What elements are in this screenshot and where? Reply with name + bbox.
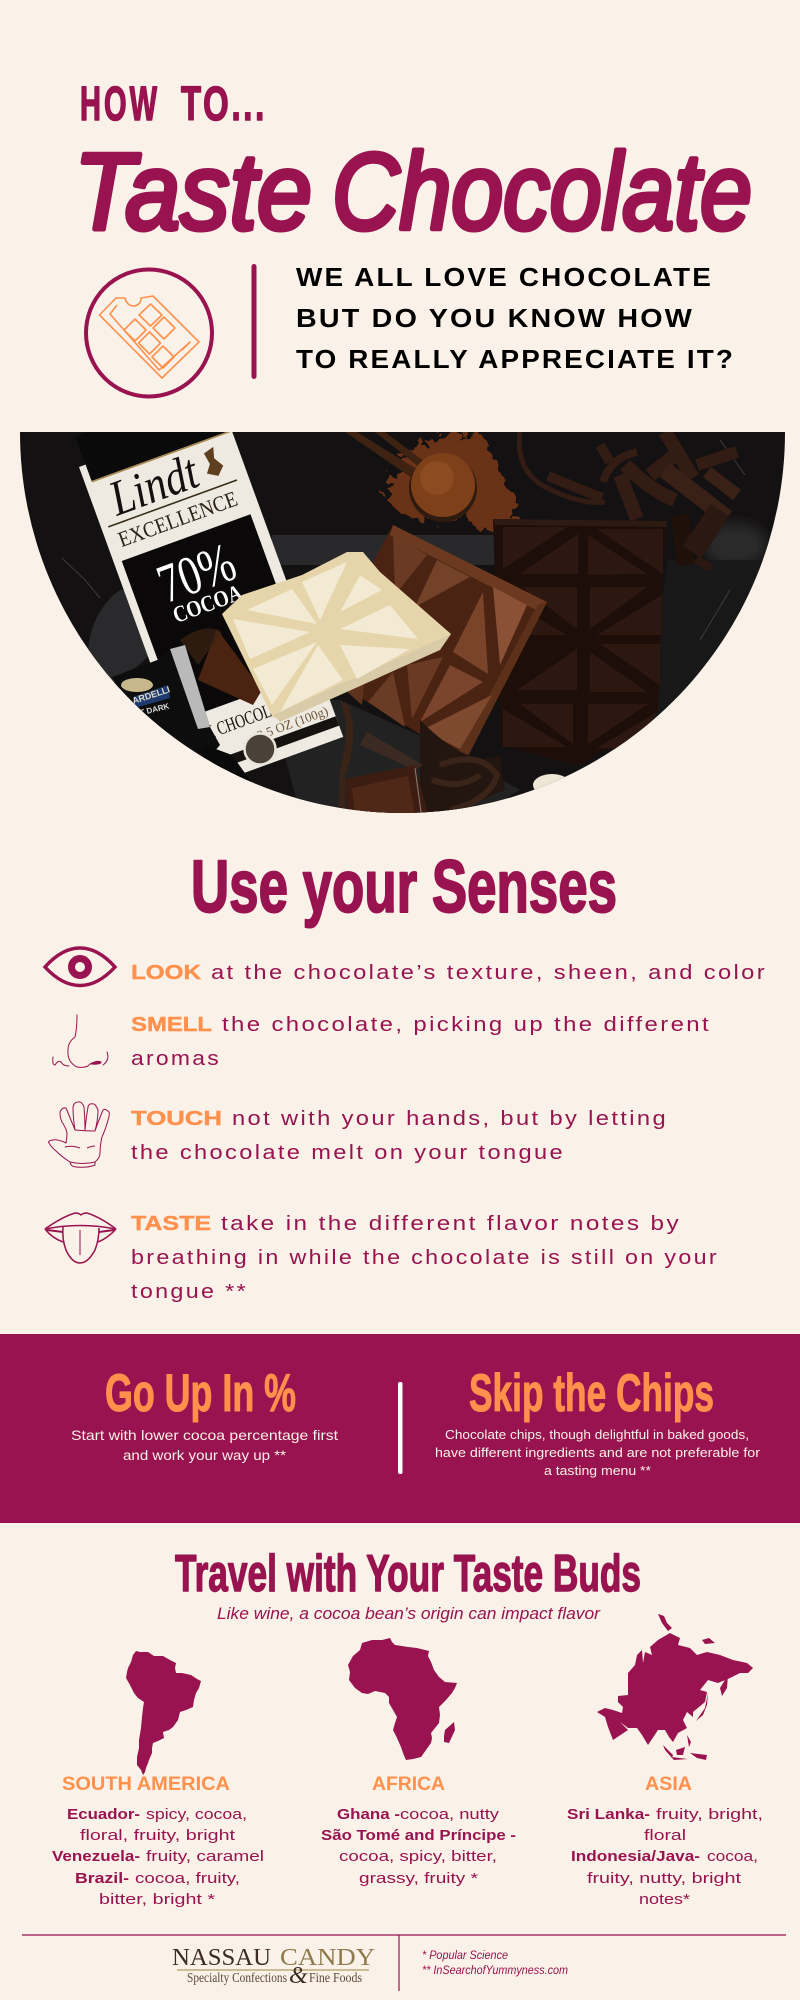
text: africa flavors: cocoa, nutty: [400, 1806, 500, 1823]
lindt wrapper: EXCELLENCE: [115, 486, 241, 552]
text: south america flavors: floral, fruity, bright: [80, 1827, 236, 1844]
ghirardelli wrapper: [112, 645, 252, 782]
logo: nassau candy: Fine Foods: [309, 1971, 362, 1986]
ghirardelli wrapper: ARDELLI: [131, 684, 171, 706]
tip: skip the chips: Chocolate chips, though delightful in baked goods,: [445, 1427, 749, 1442]
tagline: WE ALL LOVE CHOCOLATE: [296, 262, 713, 292]
icon: chocolate bar in circle: [86, 270, 212, 396]
tip: skip the chips: have different ingredients and are not preferable for: [435, 1445, 761, 1460]
panel: tips band: [0, 1334, 800, 1523]
sources: * Popular Science: [422, 1950, 508, 1962]
label: south america: SOUTH AMERICA: [62, 1774, 230, 1795]
dark chocolate bar: [493, 519, 667, 766]
map: africa: [348, 1638, 457, 1760]
logo: nassau candy: Specialty Confections: [187, 1971, 287, 1986]
icon: nose: [53, 1015, 108, 1067]
text: south america flavors: bitter, bright *: [99, 1891, 215, 1908]
tip: go up in percent: and work your way up **: [123, 1447, 287, 1463]
bottom chocolate pieces: [338, 700, 571, 814]
lindt wrapper: Lindt: [101, 443, 206, 527]
white chocolate: [222, 552, 451, 722]
photo: chocolate bars in half circle: [20, 432, 785, 813]
text: asia flavors: cocoa,: [707, 1848, 758, 1865]
lindt wrapper: COCOA: [169, 580, 246, 628]
heading: how to: HOW: [80, 78, 160, 131]
icon: lips and tongue: [45, 1213, 116, 1263]
tagline: BUT DO YOU KNOW HOW: [296, 303, 694, 333]
logo: nassau candy: NASSAU: [172, 1945, 271, 1971]
divider: [398, 1382, 402, 1474]
sense: look: [45, 948, 767, 986]
heading: how to: TO...: [181, 78, 267, 131]
text: south america flavors: Ecuador-: [67, 1806, 140, 1823]
milk chocolate bar: [340, 525, 547, 762]
sense: look: at the chocolate’s texture, sheen, and color: [211, 962, 767, 984]
text: south america flavors: fruity, caramel: [146, 1848, 264, 1865]
sense: taste: tongue **: [131, 1281, 248, 1303]
cocoa powder and spoon: [345, 432, 516, 531]
text: asia flavors: fruity, bright,: [656, 1806, 763, 1823]
ghirardelli wrapper: T DARK: [139, 701, 170, 718]
text: south america flavors: cocoa, fruity,: [135, 1870, 240, 1887]
sense: taste: TASTE: [131, 1213, 211, 1235]
icon: hand: [48, 1102, 109, 1167]
text: africa flavors: São Tomé and Príncipe -: [321, 1827, 516, 1844]
sense: taste: take in the different flavor notes by: [221, 1213, 681, 1235]
tip: skip the chips: [435, 1364, 761, 1478]
label: asia: ASIA: [645, 1774, 692, 1795]
tagline: TO REALLY APPRECIATE IT?: [296, 344, 735, 374]
text: asia flavors: [567, 1806, 763, 1908]
sense: touch: the chocolate melt on your tongue: [131, 1142, 565, 1164]
tip: skip the chips: a tasting menu **: [544, 1463, 651, 1478]
text: south america flavors: spicy, cocoa,: [146, 1806, 247, 1823]
lindt wrapper: DARK CHOCOLATE: [174, 692, 298, 754]
heading: use your senses: Use your Senses: [191, 845, 617, 928]
text: africa flavors: [321, 1806, 516, 1887]
seal: [244, 734, 276, 764]
sense: taste: breathing in while the chocolate is still on your: [131, 1247, 719, 1269]
text: asia flavors: notes*: [639, 1891, 690, 1908]
text: asia flavors: fruity, nutty, bright: [587, 1870, 742, 1887]
text: asia flavors: Indonesia/Java-: [571, 1848, 700, 1865]
lindt wrapper: 3.5 OZ (100g): [255, 703, 330, 743]
logo: nassau candy: &: [289, 1963, 308, 1989]
sources: [422, 1950, 568, 1977]
sources: ** InSearchofYummyness.com: [422, 1965, 568, 1977]
lindt inner square: [180, 628, 262, 705]
sense: touch: TOUCH: [131, 1108, 222, 1130]
chocolate shavings: [519, 432, 737, 568]
logo: nassau candy: CANDY: [280, 1945, 375, 1971]
lindt wrapper: 70%: [149, 531, 243, 615]
sense: smell: [53, 1014, 711, 1070]
text: africa flavors: grassy, fruity *: [359, 1870, 478, 1887]
text: south america flavors: Venezuela-: [52, 1848, 140, 1865]
text: asia flavors: Sri Lanka-: [567, 1806, 650, 1823]
text: asia flavors: floral: [644, 1827, 686, 1844]
text: africa flavors: Ghana -: [337, 1806, 400, 1823]
tagline: [296, 262, 735, 374]
text: south america flavors: [52, 1806, 264, 1908]
title: taste chocolate: [74, 131, 752, 253]
sense: look: LOOK: [131, 962, 202, 984]
lindt wrapper: [76, 432, 344, 776]
sense: taste: [45, 1213, 719, 1303]
title: taste chocolate: Taste: [74, 131, 312, 253]
sense: touch: [48, 1102, 668, 1167]
text: africa flavors: cocoa, spicy, bitter,: [339, 1848, 497, 1865]
label: africa: AFRICA: [372, 1774, 445, 1795]
logo: nassau candy: [172, 1945, 375, 1989]
map: asia: [597, 1614, 753, 1760]
tip: go up in percent: Start with lower cocoa percentage first: [71, 1427, 338, 1443]
tip: go up in percent: [71, 1364, 338, 1463]
sense: touch: not with your hands, but by letting: [232, 1108, 668, 1130]
text: south america flavors: Brazil-: [75, 1870, 129, 1887]
tip: go up in percent: Go Up In %: [105, 1364, 296, 1423]
sense: smell: aromas: [131, 1048, 221, 1070]
icon: eye: [45, 948, 115, 986]
footer rule: [22, 1935, 786, 1991]
subtitle: Like wine, a cocoa bean’s origin can impact flavor: [217, 1604, 601, 1623]
sense: smell: SMELL: [131, 1014, 212, 1036]
sense: smell: the chocolate, picking up the different: [222, 1014, 711, 1036]
divider bar: [252, 264, 256, 379]
map: south america: [126, 1651, 201, 1775]
